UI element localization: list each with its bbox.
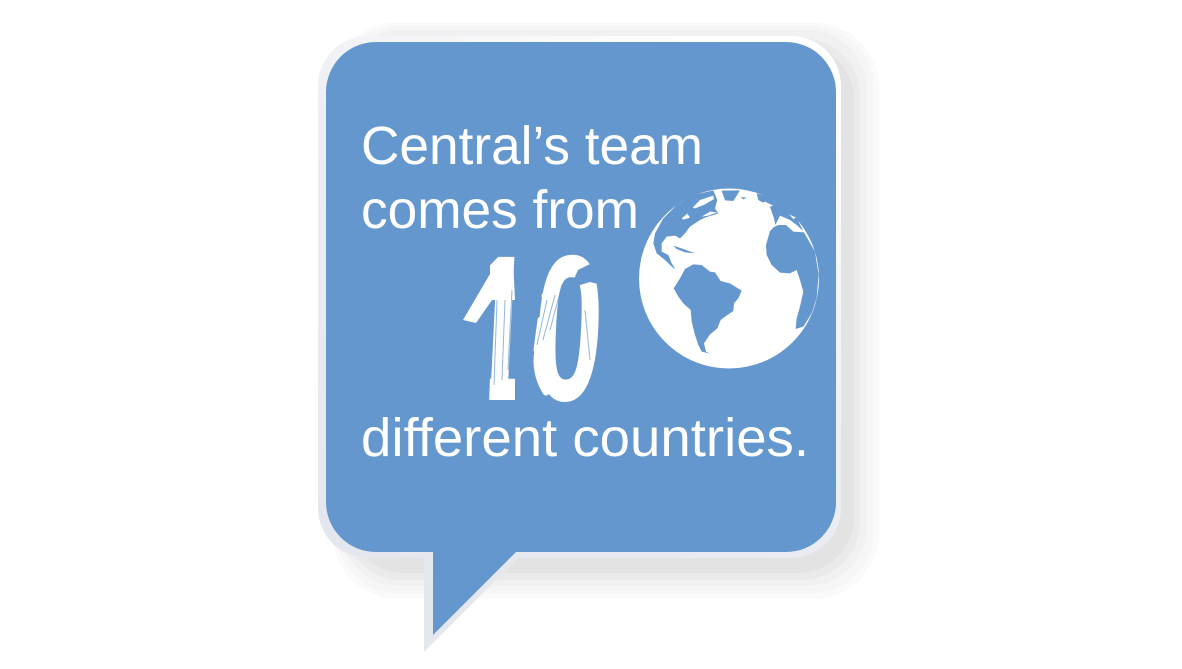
Greenland [722,190,740,201]
Arctic land gaps [682,196,796,220]
brush shaping [460,248,606,406]
icon: globe [639,188,819,368]
Cuba [673,246,695,253]
bubble fill [326,42,836,635]
bubble outline [318,36,841,652]
heading line 1: Central’s team [361,116,703,176]
North America [653,190,718,269]
South America [674,264,742,354]
Iceland [741,197,747,199]
heading line 2: comes from [361,180,639,240]
heading line 3: different countries. [361,408,809,468]
bubble drop shadow [332,22,879,599]
number 10: 10 [459,213,609,445]
Africa [766,225,819,329]
Eurasia [757,193,803,231]
